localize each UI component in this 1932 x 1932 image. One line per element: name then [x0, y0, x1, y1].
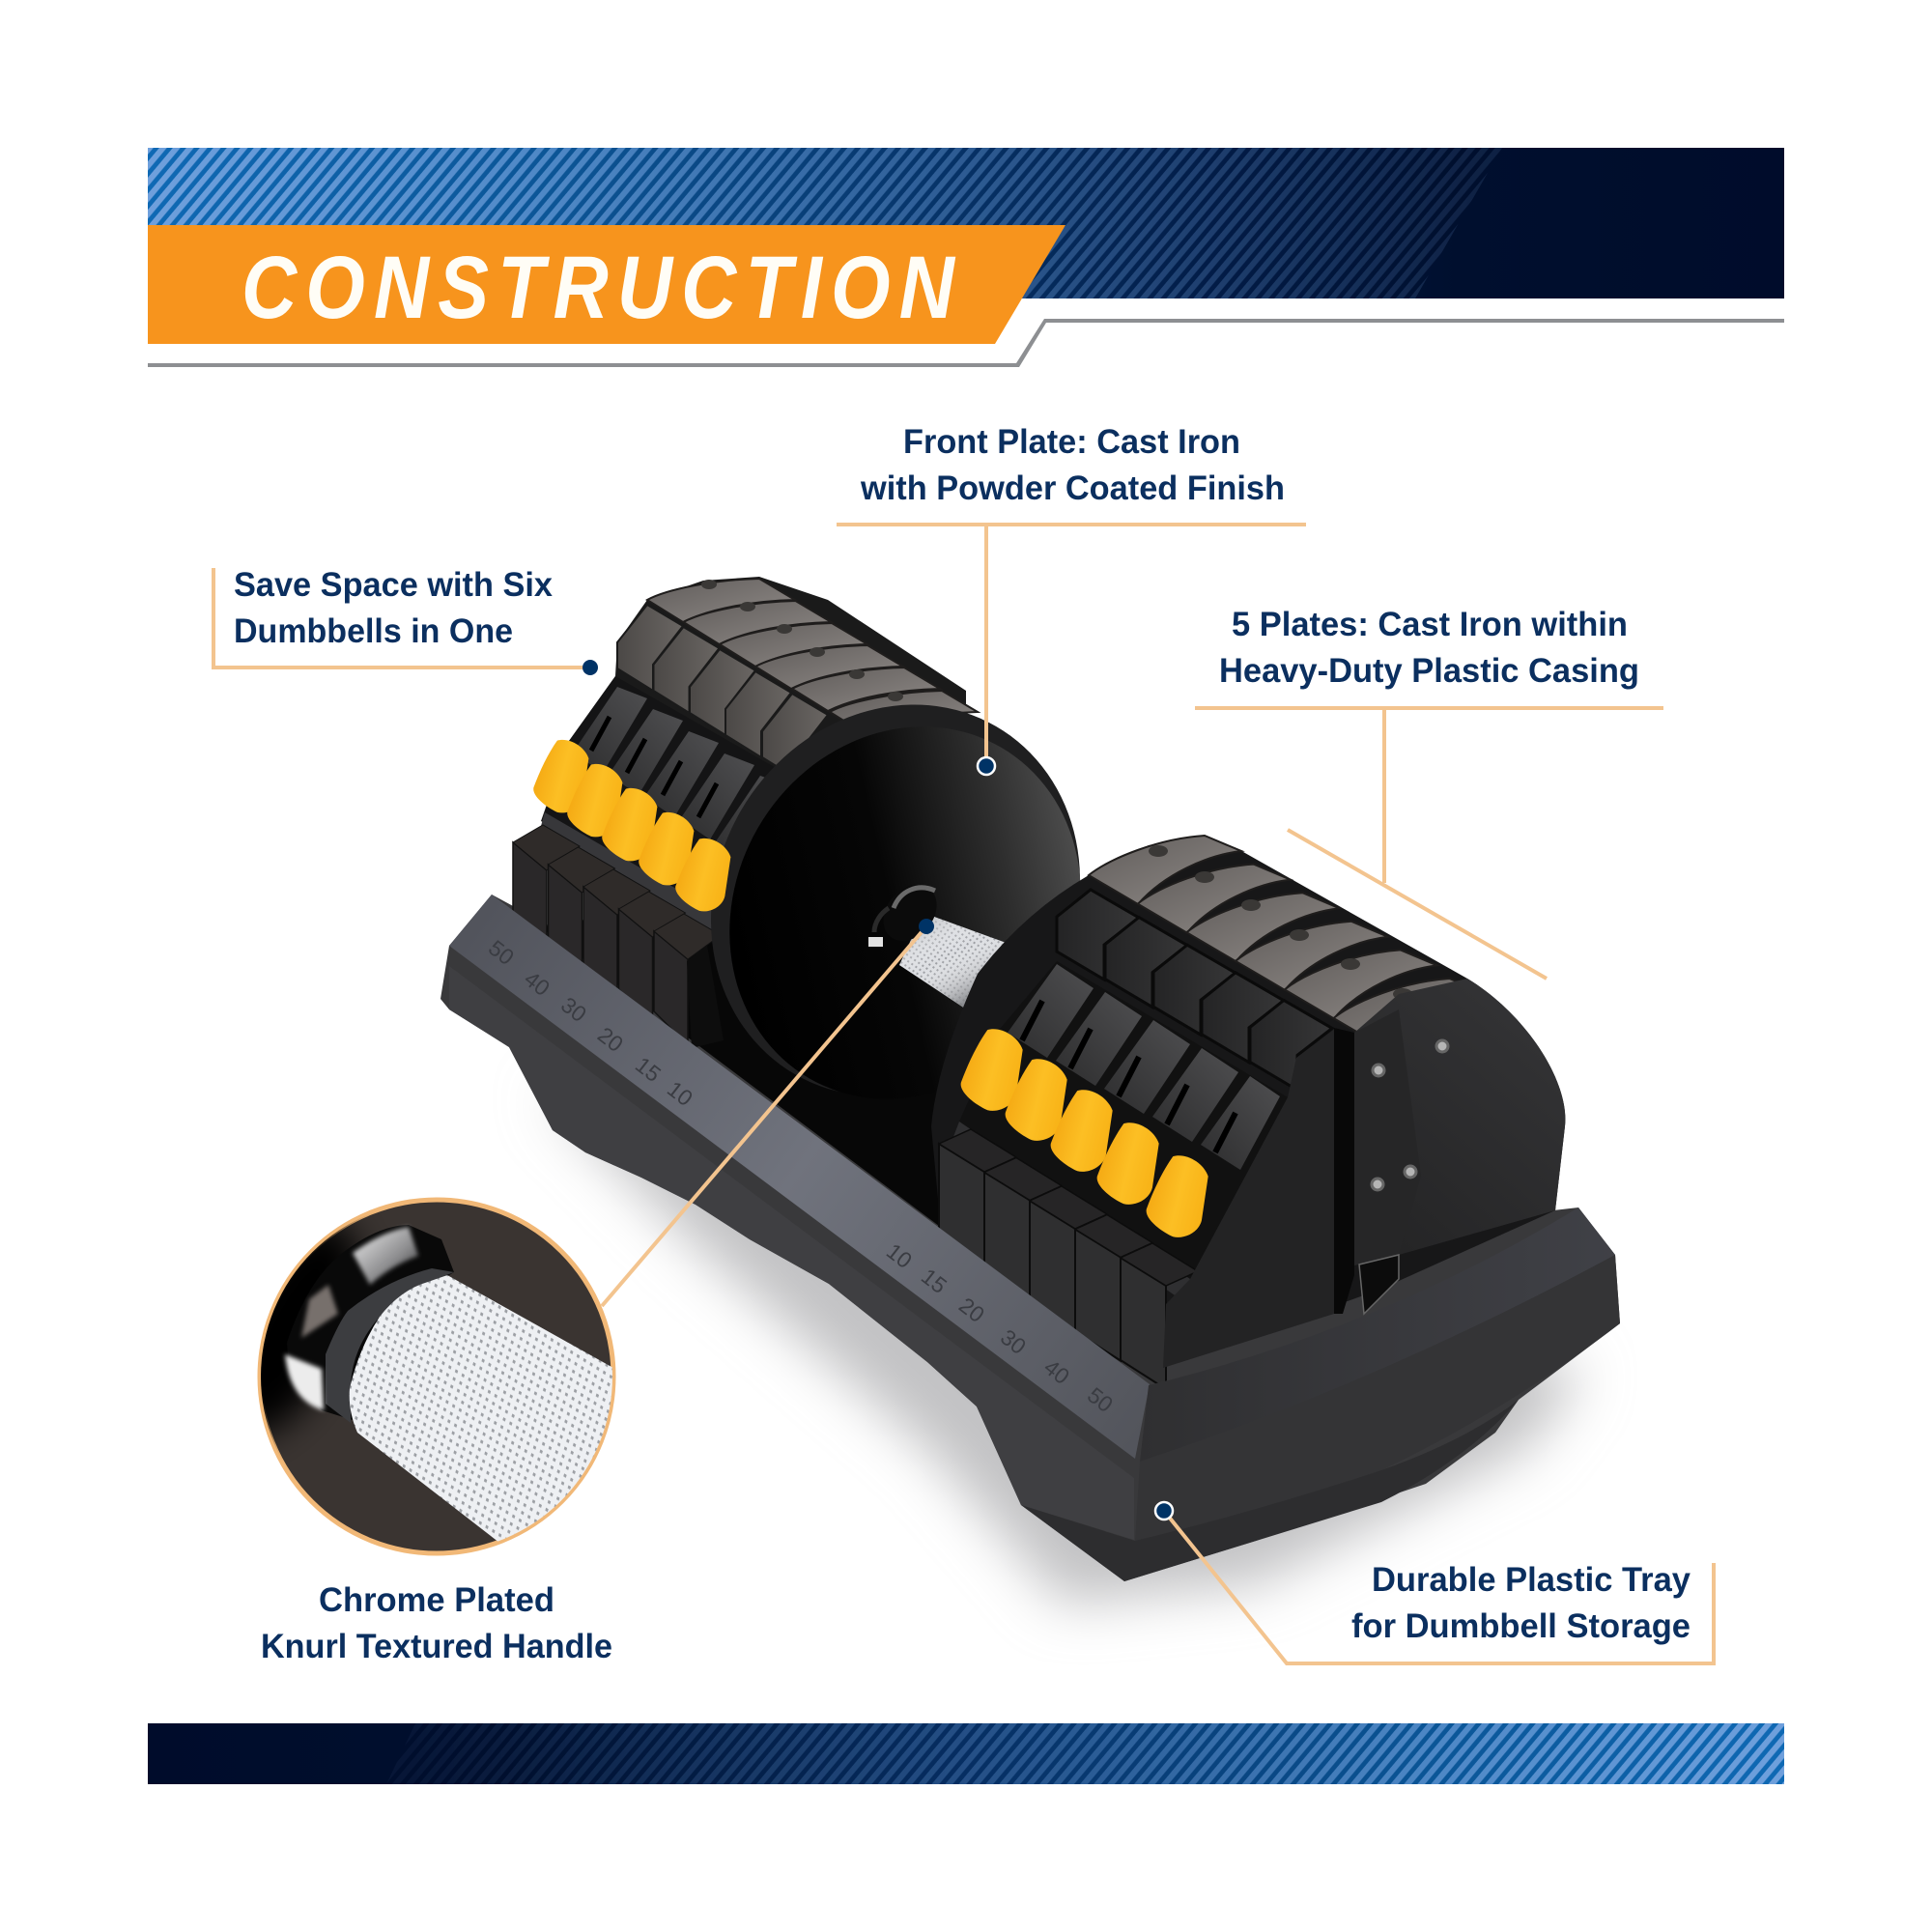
tray ruler face with weight markings: 20: [593, 1022, 628, 1057]
callout: tray: [1155, 1502, 1714, 1663]
right weight stack: [931, 836, 1565, 1389]
tray right end: [1021, 1208, 1620, 1581]
inset black falloff: [261, 1214, 370, 1457]
tray ruler face with weight markings: 50: [1083, 1382, 1118, 1417]
right stack lower blocks: [939, 1129, 1198, 1389]
left front plate: [640, 637, 1151, 1164]
callout: chrome handle: [261, 919, 934, 1665]
tray ruler face with weight markings: 20: [954, 1293, 989, 1327]
inset circle: knurled handle closeup: [257, 1198, 616, 1555]
tray ruler face with weight markings: 40: [1039, 1354, 1074, 1389]
callout: save space: [213, 566, 598, 675]
callout: front plate: Front Plate: Cast Iron: [903, 423, 1240, 461]
left weight stack: [513, 577, 1151, 1164]
tray ruler face with weight markings: 30: [996, 1324, 1031, 1359]
floor shadow: [541, 1092, 1584, 1604]
tray ruler face with weight markings: 30: [556, 992, 591, 1027]
right stack upper blocks: [1057, 890, 1332, 1090]
inset collar: [287, 1225, 454, 1420]
title: CONSTRUCTION: [242, 238, 956, 337]
tray ruler face with weight markings: 15: [917, 1264, 952, 1298]
top header banner: [148, 148, 1784, 367]
callout: front plate: with Powder Coated Finish: [860, 469, 1285, 507]
bottom banner: [148, 1723, 1784, 1784]
callout: five plates: Heavy-Duty Plastic Casing: [1219, 652, 1639, 690]
right stack yellow selector knobs: [956, 1024, 1215, 1242]
tray ruler face with weight markings: 15: [631, 1052, 666, 1087]
tray ruler face with weight markings: 10: [663, 1076, 697, 1111]
right end plate with screws: [1334, 979, 1565, 1314]
right stack top plates: [1089, 836, 1486, 1047]
left stack top plates: [647, 579, 978, 734]
right stack silhouette: [931, 836, 1565, 1368]
callout: tray: for Dumbbell Storage: [1351, 1607, 1690, 1645]
left stack lower blocks: [513, 825, 724, 1048]
left stack selector panel: [539, 676, 791, 942]
right stack selector panel: [952, 961, 1288, 1299]
callout: front plate: [837, 423, 1306, 775]
left stack upper blocks: [617, 605, 828, 780]
handle: [868, 874, 1011, 1014]
callout: chrome handle: Knurl Textured Handle: [261, 1628, 612, 1665]
callout: tray: Durable Plastic Tray: [1372, 1561, 1691, 1599]
left stack backing silhouette: [541, 577, 966, 927]
callout: save space: Save Space with Six: [234, 566, 554, 604]
dumbbell tray body: [440, 869, 1620, 1581]
tray ruler face with weight markings: 40: [520, 966, 554, 1001]
tray ruler face with weight markings: 50: [484, 935, 519, 970]
callout: chrome handle: Chrome Plated: [319, 1581, 554, 1619]
tray ruler face with weight markings: [449, 895, 1150, 1459]
callout: save space: Dumbbells in One: [234, 612, 513, 650]
callout: five plates: 5 Plates: Cast Iron within: [1232, 606, 1628, 643]
left stack yellow selector knobs: [529, 735, 737, 916]
right stack side wall: [1163, 1028, 1336, 1368]
tray ruler face with weight markings: 10: [882, 1238, 917, 1273]
callout: five plates: [1195, 606, 1663, 979]
inset knurled bar: [350, 1275, 612, 1542]
